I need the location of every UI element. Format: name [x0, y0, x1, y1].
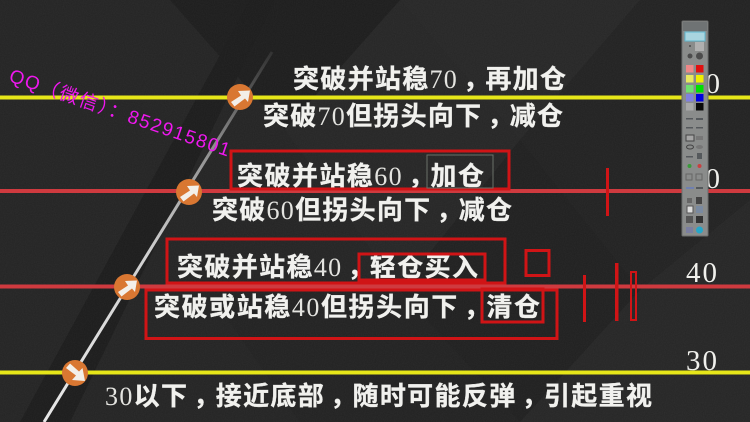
icon: orange arrow 30 — [62, 360, 88, 386]
level numbers — [686, 68, 722, 377]
text: failure at 40: 突破或站稳40但拐头向下 ，清仓 — [154, 292, 540, 322]
watermark: QQ contact: QQ（微信）：852915801 — [6, 65, 233, 161]
text: breakout above 40: 突破并站稳40，轻仓买入 — [177, 252, 478, 282]
level line: 30 yellow — [0, 370, 750, 374]
level numbers: 60 — [689, 163, 722, 195]
toolbar: drawing palette — [682, 21, 708, 236]
text: breakout above 70: 突破并站稳70，再加仓 — [293, 64, 566, 94]
level numbers: 30 — [686, 345, 719, 377]
red box: 40 failure sentence — [146, 290, 557, 338]
red square — [526, 250, 549, 276]
gray box: add position — [427, 155, 493, 188]
red box: clear position — [482, 289, 543, 322]
red box: light buy — [359, 254, 485, 280]
toolbar colour swatches — [686, 65, 704, 110]
level numbers: 40 — [686, 257, 719, 289]
level line: 40 red — [0, 284, 750, 288]
level numbers: 70 — [689, 68, 722, 100]
text: below 30: 30以下，接近底部，随时可能反弹，引起重视 — [105, 381, 652, 411]
toolbar button — [685, 32, 705, 41]
toolbar brush sizes — [688, 42, 704, 60]
text: failure at 60: 突破60但拐头向下，减仓 — [212, 195, 512, 225]
icon: orange arrow 70 — [227, 84, 253, 110]
red box: 40 sentence — [167, 239, 505, 283]
toolbar tool icons — [686, 118, 703, 234]
red narrow rectangle — [631, 272, 636, 320]
text: failure at 70: 突破70但拐头向下，减仓 — [263, 101, 563, 131]
red tick marks — [583, 168, 618, 322]
icon: orange arrow 40 — [114, 274, 140, 300]
level line: 70 yellow — [0, 96, 750, 100]
red box: 60 sentence — [231, 151, 509, 189]
text: breakout above 60: 突破并站稳60，加仓 — [237, 161, 484, 191]
icon: orange arrow 60 — [176, 179, 202, 205]
level line: 60 red — [0, 189, 750, 193]
diagonal white line — [44, 52, 272, 422]
